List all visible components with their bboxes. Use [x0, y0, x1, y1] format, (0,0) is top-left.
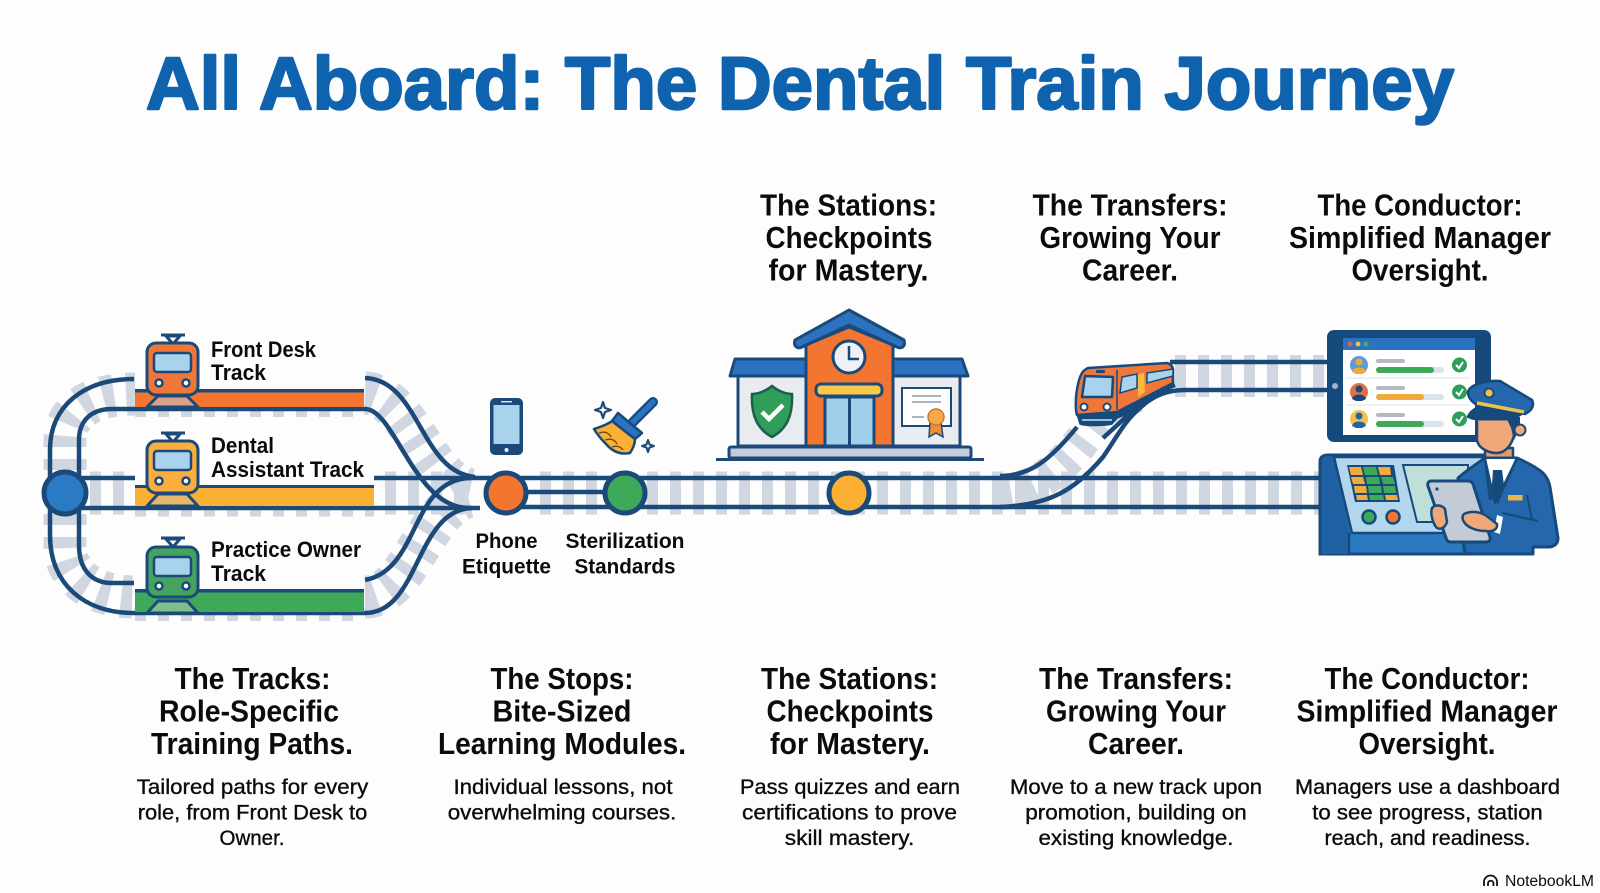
panel: the conductor: Simplified Manager	[1296, 694, 1558, 728]
row 3	[1350, 410, 1467, 428]
watermark: NotebookLM: NotebookLM	[1505, 873, 1594, 890]
panel: the tracks: The Tracks:	[174, 661, 330, 696]
icon: station building	[716, 310, 984, 461]
panel: the conductor	[1295, 661, 1560, 850]
panel: the stops: Individual lessons, not	[454, 775, 673, 799]
heading: conductor (top): Oversight.	[1352, 252, 1488, 288]
panel: the transfers: promotion, building on	[1025, 800, 1247, 824]
panel: the stops	[438, 661, 686, 824]
icon: transfer train	[1076, 363, 1174, 426]
panel: the tracks: role, from Front Desk to	[138, 800, 367, 824]
heading: stations (top): for Mastery.	[768, 252, 928, 288]
platform: front desk	[135, 389, 364, 407]
row 1	[1350, 356, 1467, 374]
panel: the tracks	[137, 661, 368, 850]
heading: transfers (top): Growing Your	[1040, 220, 1220, 255]
stop label: sterilization standards: Standards	[574, 554, 676, 578]
heading: conductor (top): The Conductor:	[1318, 188, 1522, 222]
icon: broom	[594, 402, 654, 454]
keypad	[1347, 465, 1400, 502]
panel: the stops: Bite-Sized	[492, 694, 632, 728]
heading: stations (top): The Stations:	[760, 188, 937, 222]
panel: the transfers: Growing Your	[1046, 694, 1226, 728]
platform: practice owner	[135, 589, 364, 612]
label: dental assistant track: Dental	[211, 433, 274, 458]
label: dental assistant track	[211, 433, 365, 482]
label: front desk track	[211, 337, 317, 385]
icon: phone	[490, 398, 523, 455]
stop: green	[605, 473, 645, 513]
heading: transfers (top)	[1032, 188, 1228, 288]
platform: dental assistant	[135, 485, 374, 506]
panel: the conductor: reach, and readiness.	[1324, 826, 1530, 850]
row 2	[1350, 383, 1467, 401]
hands	[1431, 505, 1447, 529]
stop label: phone etiquette: Phone	[476, 529, 538, 553]
label: front desk track: Track	[211, 360, 267, 385]
panel: the stations: Pass quizzes and earn	[740, 775, 960, 799]
panel: the transfers: Move to a new track upon	[1010, 775, 1262, 799]
heading: conductor (top): Simplified Manager	[1289, 220, 1551, 255]
stop label: phone etiquette: Etiquette	[462, 554, 551, 578]
panel: the tracks: Owner.	[220, 826, 284, 850]
label: dental assistant track: Assistant Track	[211, 457, 365, 482]
heading: transfers (top): The Transfers:	[1032, 188, 1228, 222]
label: practice owner track: Track	[211, 561, 267, 586]
panel: the stations: certifications to prove	[742, 800, 957, 824]
shield	[752, 386, 792, 437]
stop: yellow	[829, 473, 869, 513]
hub node	[44, 472, 86, 514]
control console	[1320, 455, 1490, 554]
icon: green train	[147, 538, 198, 613]
panel: the stations: for Mastery.	[770, 726, 930, 761]
stop label: phone etiquette	[462, 529, 551, 578]
icon: yellow train	[147, 433, 198, 506]
panel: the stations: Checkpoints	[766, 694, 934, 728]
panel: the transfers: existing knowledge.	[1038, 826, 1234, 850]
panel: the stations: skill mastery.	[785, 826, 914, 850]
dashboard tablet	[1327, 330, 1491, 442]
main line rails	[490, 362, 1327, 507]
label: practice owner track	[211, 537, 361, 586]
tracks network	[50, 378, 490, 613]
jacket	[1458, 458, 1558, 554]
label: front desk track: Front Desk	[211, 337, 317, 362]
icon: orange train	[147, 335, 198, 407]
panel: the conductor: to see progress, station	[1312, 800, 1543, 824]
panel: the transfers: The Transfers:	[1039, 661, 1233, 696]
cap	[1468, 381, 1533, 414]
panel: the transfers	[1010, 661, 1262, 850]
heading: conductor (top)	[1289, 188, 1551, 288]
panel: the tracks: Role-Specific	[159, 694, 339, 728]
panel: the conductor: Oversight.	[1358, 726, 1496, 761]
heading: transfers (top): Career.	[1082, 252, 1178, 288]
panel: the stops: overwhelming courses.	[448, 800, 676, 824]
panel: the stops: The Stops:	[490, 661, 634, 696]
panel: the tracks: Training Paths.	[151, 726, 353, 761]
stop label: sterilization standards	[566, 529, 684, 578]
panel: the conductor: Managers use a dashboard	[1295, 775, 1560, 799]
railway sleepers	[65, 376, 1327, 618]
face	[1477, 418, 1514, 453]
label: practice owner track: Practice Owner	[211, 537, 361, 562]
stop: orange	[486, 473, 526, 513]
cuff	[1494, 515, 1503, 534]
panel: the transfers: Career.	[1088, 726, 1184, 761]
neck	[1485, 448, 1513, 462]
panel: the stations: The Stations:	[761, 661, 938, 696]
conductor figure	[1428, 381, 1558, 554]
certificate	[902, 388, 951, 437]
hand-held tablet	[1428, 481, 1490, 542]
panel: the stations	[740, 661, 960, 850]
heading: stations (top): Checkpoints	[766, 220, 932, 255]
title: All Aboard: The Dental Train Journey	[146, 42, 1454, 125]
panel: the tracks: Tailored paths for every	[137, 775, 368, 799]
panel: the conductor: The Conductor:	[1324, 661, 1530, 696]
panel: the stops: Learning Modules.	[438, 726, 686, 761]
clock	[833, 341, 865, 373]
stop label: sterilization standards: Sterilization	[566, 529, 684, 553]
heading: stations (top)	[760, 188, 937, 288]
